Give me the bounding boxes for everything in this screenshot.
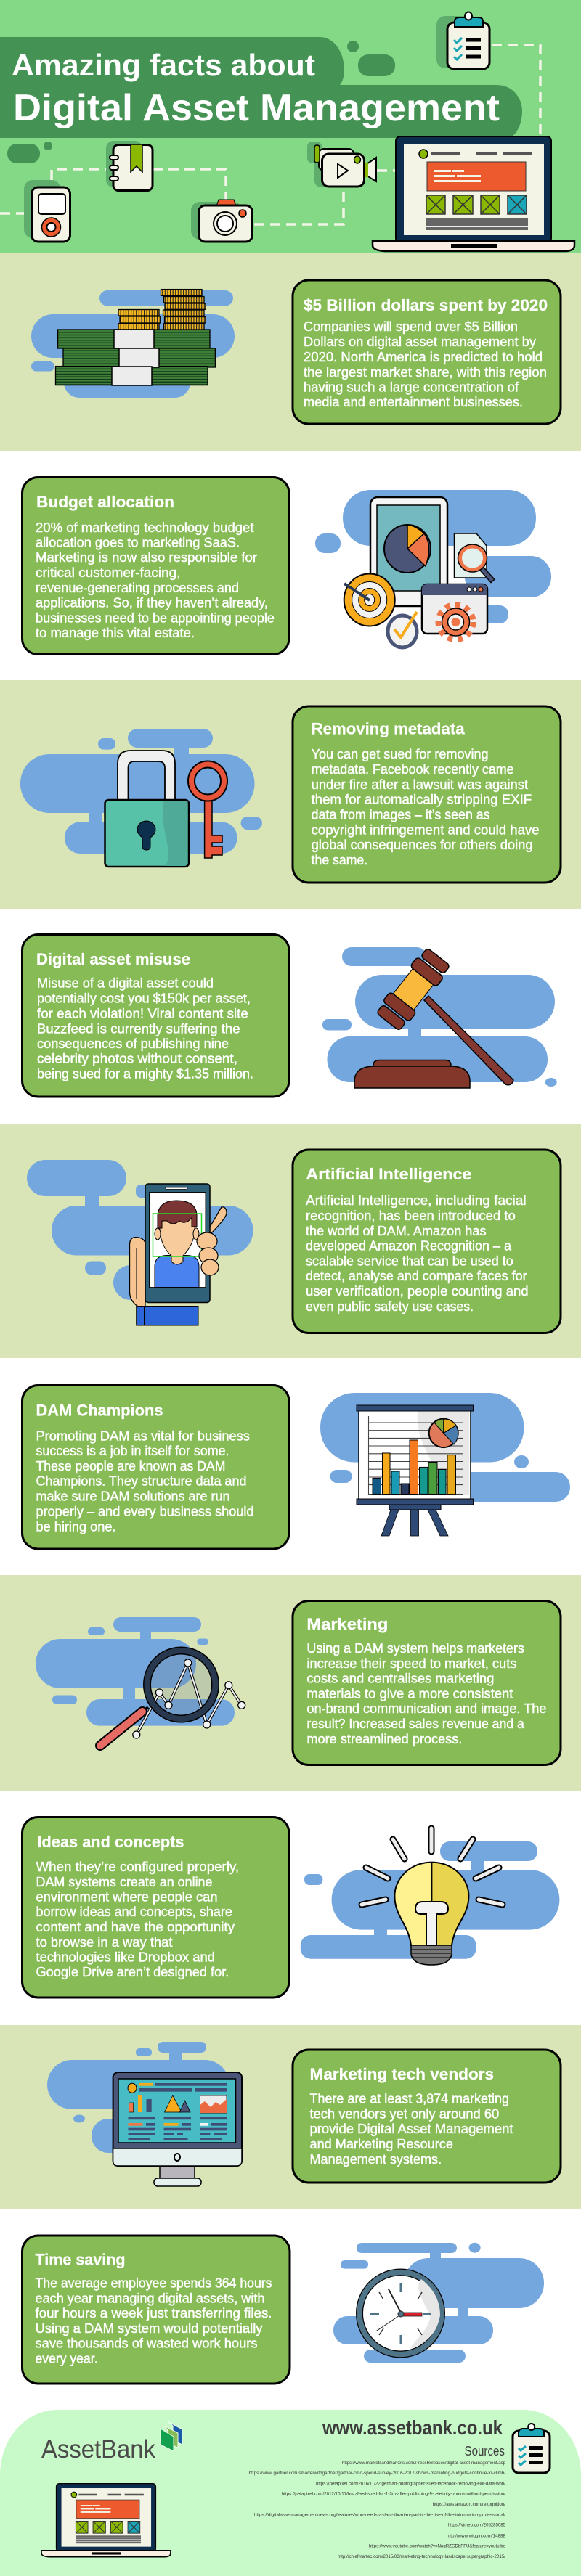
text block: metadata. Facebook recently came xyxy=(312,762,514,777)
panel: Digital asset misuse xyxy=(22,935,557,1097)
card: Removing metadata xyxy=(293,706,561,883)
sources list: https://www.marketsandmarkets.com/PressReleases/digital-asset-management.asp xyxy=(342,2461,506,2466)
panel: Budget allocation xyxy=(22,478,551,655)
text block: to browse in a way that xyxy=(36,1935,173,1950)
text block: Management systems. xyxy=(309,2152,442,2167)
icon: camera xyxy=(191,200,253,242)
heading: $5 Billion dollars spent by 2020 xyxy=(304,296,548,314)
text block: Google Drive aren’t designed for. xyxy=(36,1965,229,1979)
text block: developed Amazon Recognition – a xyxy=(306,1238,512,1253)
text block: revenue-generating processes and xyxy=(36,581,239,595)
icon: laptop xyxy=(373,136,574,251)
text block: Marketing is now also responsible for xyxy=(36,550,257,565)
text block: The average employee spends 364 hours xyxy=(35,2276,272,2291)
icon: clipboard xyxy=(436,12,489,69)
text block xyxy=(36,520,275,640)
heading: Time saving xyxy=(35,2250,125,2269)
text block xyxy=(36,1860,239,1979)
text block: recognition, has been introduced to xyxy=(306,1209,516,1223)
text block: more streamlined process. xyxy=(306,1732,462,1746)
logo wordmark: AssetBank xyxy=(41,2435,155,2463)
logo mark xyxy=(161,2421,182,2451)
text block: businesses need to be appointing people xyxy=(36,611,275,626)
text block: being sued for a mighty $1.35 million. xyxy=(37,1067,253,1081)
text block: increase their speed to market, cuts xyxy=(306,1656,516,1671)
heading: Marketing tech vendors xyxy=(309,2065,494,2083)
card: Budget allocation xyxy=(22,478,289,655)
text block: DAM systems create an online xyxy=(36,1875,212,1889)
text block: potentially cost you $150k per asset, xyxy=(37,991,251,1006)
text block: Artificial Intelligence, including facial xyxy=(306,1193,527,1208)
text block: under fire after a lawsuit was against xyxy=(312,777,528,792)
text block: to manage this vital estate. xyxy=(36,626,195,640)
sources list xyxy=(249,2461,506,2559)
heading: Ideas and concepts xyxy=(38,1833,184,1851)
text block: 20% of marketing technology budget xyxy=(36,520,254,535)
text block: data from images – it’s seen as xyxy=(312,807,490,822)
card: DAM Champions xyxy=(22,1385,289,1549)
heading: Budget allocation xyxy=(36,493,174,511)
text block xyxy=(37,976,253,1081)
text block: Buzzfeed is currently suffering the xyxy=(37,1022,240,1036)
heading: Digital asset misuse xyxy=(36,950,190,968)
illustration: magnifier over line chart xyxy=(36,1617,245,1746)
icon: video camera xyxy=(307,142,376,187)
panel: Ideas and concepts xyxy=(22,1817,559,1998)
text block: applications. So, if they haven’t already, xyxy=(36,595,268,610)
text block: content and have the opportunity xyxy=(36,1920,235,1934)
text block: copyright infringement and could have xyxy=(312,823,540,838)
sources list: https://aws.amazon.com/rekognition/ xyxy=(433,2503,505,2507)
text block: the same. xyxy=(312,853,367,867)
illustration: light bulb xyxy=(301,1828,559,1965)
panel: Marketing xyxy=(0,1575,581,1791)
text block: them for automatically stripping EXIF xyxy=(312,793,532,807)
text block: make sure DAM solutions are run xyxy=(36,1489,229,1504)
illustration: gavel xyxy=(322,946,557,1088)
panel: Artificial Intelligence xyxy=(0,1124,581,1358)
card: Marketing xyxy=(293,1601,561,1765)
icon: clipboard xyxy=(513,2424,550,2473)
text block: the world of DAM. Amazon has xyxy=(306,1224,487,1238)
text block: media and entertainment businesses. xyxy=(304,395,523,409)
text block: every year. xyxy=(35,2352,97,2366)
text block: celebrity photos without consent, xyxy=(37,1051,237,1066)
text block: You can get sued for removing xyxy=(312,747,489,761)
sources list: https://digitalassetmanagementnews.org/features/who-needs-a-dam-librarian-part-iv-the-rise-of-the-information-professional/ xyxy=(254,2513,505,2517)
text block: There are at least 3,874 marketing xyxy=(309,2092,509,2106)
text block xyxy=(36,1428,254,1534)
text block xyxy=(35,2276,272,2366)
text block: environment where people can xyxy=(36,1890,218,1905)
text block: critical customer-facing, xyxy=(36,565,181,580)
text block: each year managing digital assets, with xyxy=(35,2291,264,2305)
heading: Removing metadata xyxy=(312,720,465,738)
card: Ideas and concepts xyxy=(22,1817,289,1998)
text block: When they’re configured properly, xyxy=(36,1860,239,1874)
sources list: https://vimeo.com/205285085 xyxy=(448,2523,506,2527)
icon: notebook xyxy=(106,141,153,190)
sources list: http://chiefmartec.com/2015/03/marketing-technology-landscape-supergraphic-2015/ xyxy=(338,2555,505,2559)
illustration: analytics tablet, target and gear xyxy=(315,490,551,647)
text block: Companies will spend over $5 Billion xyxy=(304,319,518,334)
text block xyxy=(304,319,547,409)
text block: Champions. They structure data and xyxy=(36,1473,247,1488)
text block: be hiring one. xyxy=(36,1520,116,1534)
text block: global consequences for others doing xyxy=(312,838,533,852)
heading: Marketing xyxy=(306,1615,388,1633)
card: Digital asset misuse xyxy=(22,935,289,1097)
card: Artificial Intelligence xyxy=(293,1150,561,1333)
heading: Artificial Intelligence xyxy=(306,1165,471,1183)
text block: technologies like Dropbox and xyxy=(36,1950,215,1964)
text block: and Marketing Resource xyxy=(309,2137,453,2151)
text block: result? Increased sales revenue and a xyxy=(306,1717,525,1731)
illustration: padlock and key xyxy=(20,729,262,867)
text block: even public safety use cases. xyxy=(306,1299,474,1314)
text block: These people are known as DAM xyxy=(36,1459,225,1473)
card: Time saving xyxy=(22,2236,290,2384)
text block: Dollars on digital asset management by xyxy=(304,335,536,349)
sources list: https://petapixel.com/2016/11/22/german-photographer-sued-facebook-removing-exif-data-won/ xyxy=(316,2482,505,2487)
heading: DAM Champions xyxy=(36,1401,163,1420)
panel: $5 Billion dollars spent by 2020 xyxy=(0,253,581,451)
text block: allocation goes to marketing SaaS. xyxy=(36,536,240,550)
text block: user verification, people counting and xyxy=(306,1284,529,1299)
sources list: https://www.gartner.com/smarterwithgartner/gartner-cmo-spend-survey-2016-2017-shows-marketing-budgets-continue-to-climb/ xyxy=(249,2471,505,2476)
title line 2: Digital Asset Management xyxy=(13,87,500,129)
text block: the largest market share, with this region xyxy=(304,365,547,380)
website url: www.assetbank.co.uk xyxy=(322,2416,503,2439)
card: $5 Billion xyxy=(293,280,561,424)
illustration: phone face recognition xyxy=(27,1160,253,1325)
card: Marketing tech vendors xyxy=(293,2050,561,2183)
title banner shape xyxy=(0,37,522,163)
illustration: desktop monitor dashboard xyxy=(47,2042,242,2186)
text block: Promoting DAM as vital for business xyxy=(36,1428,250,1443)
title line 1: Amazing facts about xyxy=(12,48,315,82)
illustration: wall clock xyxy=(333,2243,544,2363)
text block: success is a job in itself for some. xyxy=(36,1444,229,1458)
text block xyxy=(309,2092,513,2167)
text block: provide Digital Asset Management xyxy=(309,2122,513,2136)
sources list: https://petapixel.com/2012/10/17/buzzfeed-sued-for-1-3m-after-publishing-9-celebrity-photos-without-permission/ xyxy=(282,2493,505,2497)
illustration: presentation board chart xyxy=(320,1393,570,1536)
dashed connectors xyxy=(0,45,540,224)
text block: materials to give a more consistent xyxy=(306,1687,513,1701)
sources list: https://www.youtube.com/watch?v=NugRZGDbPFU&feature=youtu.be xyxy=(369,2545,506,2549)
text block: detect, analyse and compare faces for xyxy=(306,1269,527,1283)
panel: DAM Champions xyxy=(22,1385,570,1549)
sources heading: Sources xyxy=(465,2444,505,2458)
laptop illustration xyxy=(41,2484,171,2557)
text block xyxy=(306,1193,529,1314)
text block: on-brand communication and image. The xyxy=(306,1701,546,1716)
footer panel xyxy=(0,2410,581,2576)
text block: borrow ideas and concepts, share xyxy=(36,1905,232,1919)
text block: Misuse of a digital asset could xyxy=(37,976,214,990)
panel: Time saving xyxy=(22,2236,544,2384)
text block: scalable service that can be used to xyxy=(306,1254,513,1269)
text block: consequences of publishing nine xyxy=(37,1036,229,1051)
text block: 2020. North America is predicted to hold xyxy=(304,350,543,364)
text block: four hours a week just transferring files. xyxy=(35,2306,272,2321)
panel: Marketing tech vendors xyxy=(0,2025,581,2209)
text block: Using a DAM system would potentially xyxy=(35,2321,263,2336)
text block: having such a large concentration of xyxy=(304,380,519,395)
icon: music player xyxy=(24,180,70,242)
sources list: http://www.wiggin.com/14888 xyxy=(447,2535,506,2539)
text block xyxy=(312,747,540,867)
header panel xyxy=(0,0,581,253)
text block: for each violation! Viral content site xyxy=(37,1006,248,1021)
text block xyxy=(306,1641,546,1746)
illustration: money stack and coins xyxy=(31,290,235,398)
text block: properly – and every business should xyxy=(36,1504,254,1518)
text block: tech vendors yet only around 60 xyxy=(309,2106,499,2121)
text block: save thousands of wasted work hours xyxy=(35,2336,257,2350)
panel: Removing metadata xyxy=(0,680,581,909)
text block: costs and centralises marketing xyxy=(306,1671,494,1685)
text block: Using a DAM system helps marketers xyxy=(306,1641,524,1656)
